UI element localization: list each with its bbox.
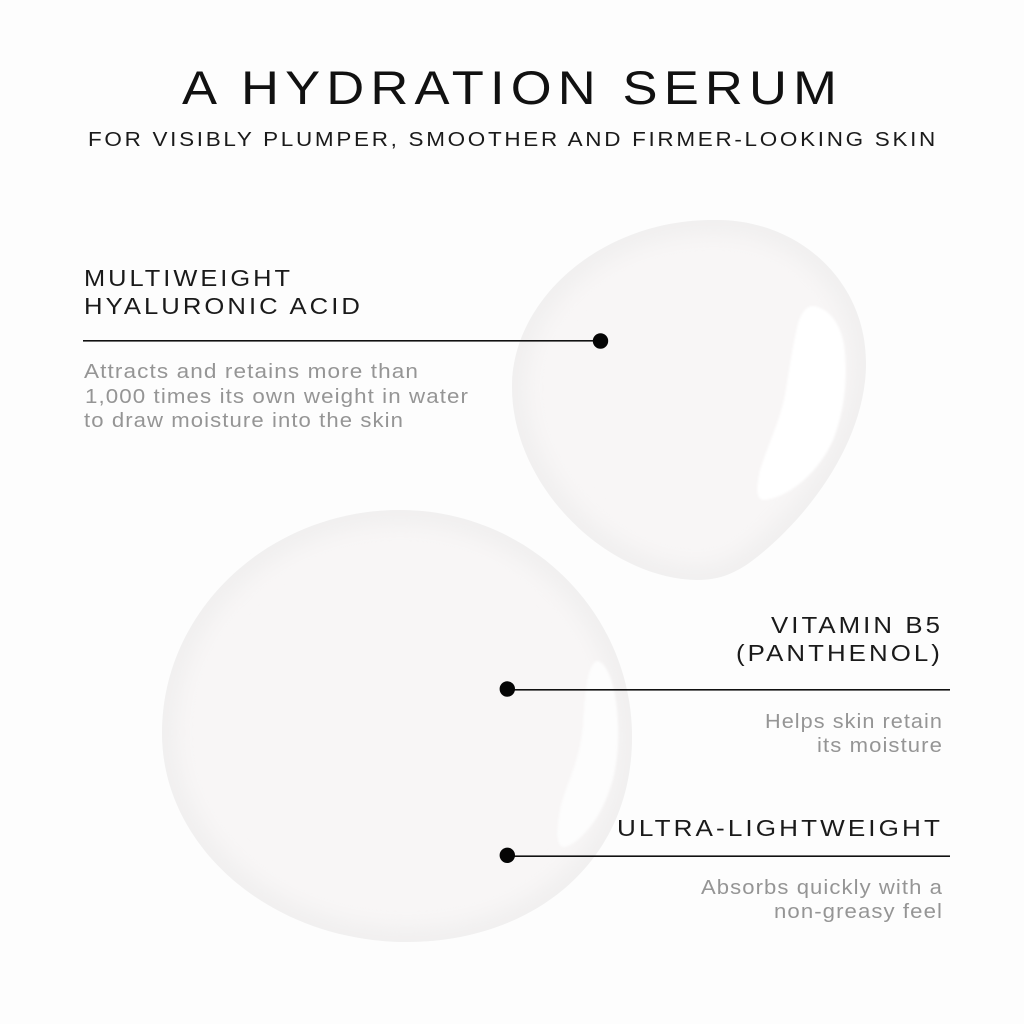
- description: hyaluronic acid: to draw moisture into the skin: [84, 409, 404, 432]
- description: hyaluronic acid: [84, 360, 469, 432]
- description: vitamin b5: [765, 710, 943, 757]
- subtitle: FOR VISIBLY PLUMPER, SMOOTHER AND FIRMER-LOOKING SKIN: [88, 129, 938, 151]
- heading: multiweight hyaluronic acid: [84, 265, 363, 319]
- heading: multiweight hyaluronic acid: HYALURONIC ACID: [84, 293, 363, 319]
- title: A HYDRATION SERUM: [182, 61, 843, 114]
- serum drop: upper blob: [512, 220, 866, 580]
- description: hyaluronic acid: 1,000 times its own weight in water: [85, 385, 469, 408]
- callout: vitamin b5: [500, 612, 950, 757]
- leader line with dot: [83, 333, 608, 349]
- heading: ultra-lightweight: ULTRA-LIGHTWEIGHT: [617, 815, 943, 841]
- leader line with dot: [500, 681, 950, 697]
- description: ultra-lightweight: [701, 876, 943, 923]
- description: vitamin b5: Helps skin retain: [765, 710, 943, 733]
- heading: vitamin b5 (panthenol): [736, 612, 943, 666]
- description: ultra-lightweight: Absorbs quickly with a: [701, 876, 943, 899]
- leader line with dot: [500, 848, 950, 863]
- callout: multiweight hyaluronic acid: [83, 265, 608, 432]
- description: vitamin b5: its moisture: [817, 734, 943, 757]
- callout: ultra-lightweight: [500, 815, 950, 923]
- description: hyaluronic acid: Attracts and retains more than: [84, 360, 419, 383]
- serum drop: lower large blob: [162, 510, 632, 942]
- heading: vitamin b5 (panthenol): VITAMIN B5: [771, 612, 943, 638]
- heading: vitamin b5 (panthenol): (PANTHENOL): [736, 640, 943, 666]
- heading: multiweight hyaluronic acid: MULTIWEIGHT: [84, 265, 293, 291]
- description: ultra-lightweight: non-greasy feel: [774, 900, 943, 923]
